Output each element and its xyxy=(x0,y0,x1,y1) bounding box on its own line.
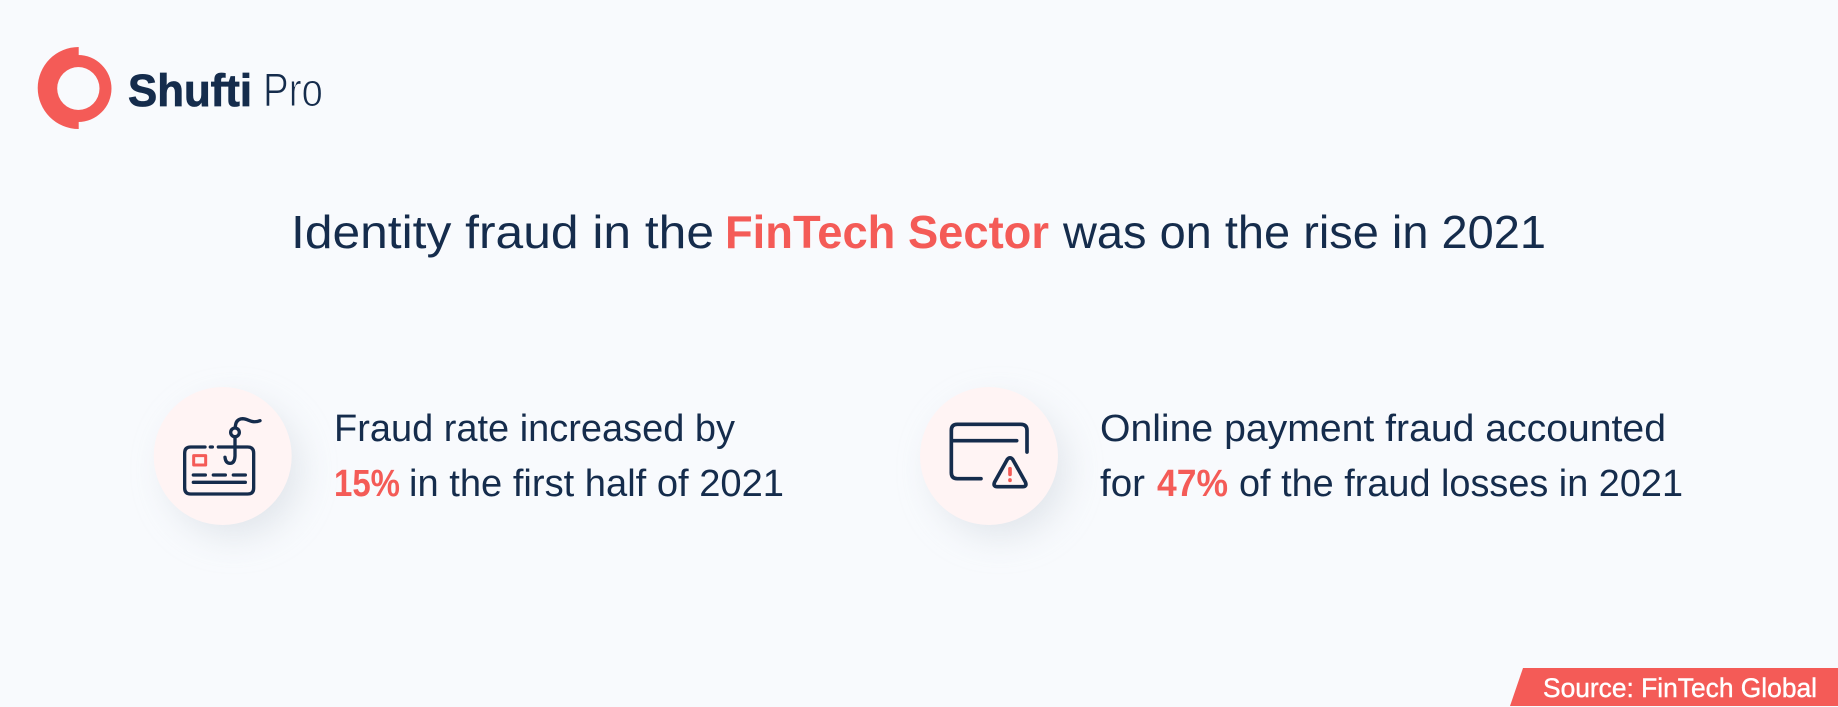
text: online payment fraud: for xyxy=(1100,463,1145,505)
text: online payment fraud: Online payment fraud accounted xyxy=(1100,408,1666,450)
title: was on the rise in 2021 xyxy=(1062,206,1546,258)
title: Identity fraud in the xyxy=(291,206,714,258)
icon: card with warning triangle xyxy=(951,424,1027,487)
text: fraud rate xyxy=(334,408,784,505)
icon circle shadow and disc xyxy=(920,387,1066,536)
icon: credit card on fishing hook xyxy=(185,419,260,494)
text: fraud rate: in the first half of 2021 xyxy=(409,463,784,505)
logo wordmark light: Pro xyxy=(263,63,323,116)
source banner xyxy=(1510,668,1838,706)
text: online payment fraud xyxy=(1100,408,1683,505)
logo: Shufti Pro xyxy=(38,47,323,129)
icon circle shadow and disc xyxy=(154,387,300,536)
source text: Source: FinTech Global xyxy=(1543,673,1817,703)
text: online payment fraud: 47% xyxy=(1157,463,1228,505)
text: online payment fraud: of the fraud losses in 2021 xyxy=(1239,463,1683,505)
title: FinTech Sector xyxy=(725,206,1049,258)
panel: online payment fraud xyxy=(920,387,1683,536)
text: fraud rate: Fraud rate increased by xyxy=(334,408,735,450)
title xyxy=(291,206,1546,258)
text: fraud rate: 15% xyxy=(334,463,400,505)
logo wordmark: Shufti xyxy=(128,65,252,116)
icon: logo ring xyxy=(38,47,111,129)
panel: fraud rate xyxy=(154,387,784,536)
